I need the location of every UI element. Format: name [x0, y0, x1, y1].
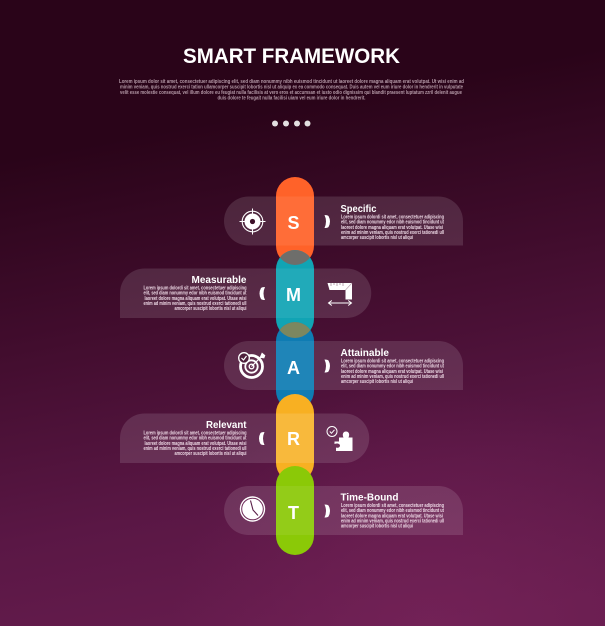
- text block: Time-Bound: enim ad minim veniam, quis nostrud exerci tationedi ull: [341, 518, 444, 524]
- icon: dartboard with check: [239, 353, 265, 378]
- text block: Time-Bound: Time-Bound: [340, 492, 398, 504]
- arrow: Measurable: [260, 287, 265, 300]
- band: Attainable: [224, 341, 463, 390]
- arrow: Attainable: [324, 360, 330, 372]
- intro paragraph: Lorem ipsum dolor sit amet, consectetuer adipiscing elit, sed diam nonummy nibh euismod tincidunt ut laoreet dolore magna aliquam erat volutpat. Ut wisi enim ad: [119, 79, 464, 85]
- text block: Specific: Specific: [340, 203, 377, 215]
- letter S: S: [287, 213, 300, 233]
- text block: Time-Bound: laoreet dolore magna aliquam erat volutpat. Utase wisi: [341, 513, 443, 519]
- text block: Attainable: enim ad minim veniam, quis nostrud exerci tationedi ull: [341, 374, 444, 380]
- intro paragraph: duis dolore te feugait nulla facilisi uiam vel eum iriure dolor in hendrerit.: [218, 96, 366, 102]
- text block: Attainable: elit, sed diam nonummy edor nibh euismod tincidunt ut: [341, 364, 444, 370]
- intro paragraph: velit esse molestie consequat, vel illum dolore eu feugiat nulla facilisis at vero eros et accumsan et iusto odio dignissim qui blandit praesent luptatum zzril delenit augue: [120, 90, 462, 96]
- intro paragraph: [119, 79, 464, 102]
- text block: Attainable: [340, 347, 444, 385]
- band: Measurable: [120, 268, 371, 318]
- text block: Specific: amcorper suscipit lobortis nisl ut aliqui: [341, 235, 413, 241]
- text block: Relevant: [144, 419, 247, 457]
- text block: Relevant: Lorem ipsum dolordi sit amet, consectetuer adipiscing: [144, 430, 246, 436]
- text block: Measurable: elit, sed diam nonummy edor nibh euismod tincidunt ut: [144, 291, 247, 297]
- text block: Measurable: laoreet dolore magna aliquam erat volutpat. Utase wisi: [144, 296, 247, 302]
- band: Specific: [224, 196, 463, 246]
- title: SMART FRAMEWORK: [183, 44, 400, 68]
- arrow: Time-Bound: [324, 504, 330, 518]
- band: Time-Bound: [224, 486, 463, 535]
- text block: Measurable: Measurable: [192, 274, 247, 286]
- text block: Relevant: amcorper suscipit lobortis nisl ut aliqui: [174, 451, 247, 457]
- pill: R: [276, 394, 314, 482]
- text block: Time-Bound: [340, 492, 444, 530]
- pagination dots: [272, 120, 310, 126]
- overlap: M and A: [280, 322, 310, 338]
- text block: Specific: laoreet dolore magna aliquam erat volutpat. Utase wisi: [341, 225, 443, 231]
- text block: Specific: Lorem ipsum dolordi sit amet, consectetuer adipiscing: [341, 214, 444, 220]
- text block: Attainable: Attainable: [340, 347, 389, 359]
- arrow: Relevant: [259, 432, 264, 445]
- text block: Specific: [340, 203, 444, 241]
- letter M: M: [286, 285, 301, 305]
- icon: puzzle piece with check: [327, 426, 352, 451]
- text block: Time-Bound: amcorper suscipit lobortis nisl ut aliqui: [341, 524, 413, 530]
- pill: T: [276, 466, 314, 555]
- text block: Measurable: [144, 274, 247, 312]
- text block: Measurable: Lorem ipsum dolordi sit amet, consectetuer adipiscing: [144, 286, 246, 292]
- band: Relevant: [120, 414, 369, 463]
- icon: crosshair target: [240, 208, 266, 234]
- pill: S: [276, 177, 314, 265]
- pill: M: [276, 250, 314, 338]
- intro paragraph: minim veniam, quis nostrud exerci tation ullamcorper suscipit lobortis nisl ut aliquip ex ea commodo consequat. Duis autem vel eum iriure dolor in hendrerit in vulputate: [120, 84, 463, 90]
- text block: Specific: enim ad minim veniam, quis nostrud exerci tationedi ull: [341, 230, 444, 236]
- text block: Relevant: laoreet dolore magna aliquam erat volutpat. Utase wisi: [144, 441, 247, 447]
- icon: clock: [240, 496, 265, 522]
- text block: Time-Bound: Lorem ipsum dolordi sit amet, consectetuer adipiscing: [341, 503, 444, 509]
- text block: Time-Bound: elit, sed diam nonummy edor nibh euismod tincidunt ut: [341, 508, 444, 514]
- text block: Relevant: Relevant: [206, 419, 247, 431]
- text block: Attainable: laoreet dolore magna aliquam erat volutpat. Utase wisi: [341, 369, 443, 375]
- letter T: T: [288, 503, 299, 523]
- letter A: A: [287, 358, 300, 378]
- text block: Relevant: elit, sed diam nonummy edor nibh euismod tincidunt ut: [144, 436, 247, 442]
- overlap: S and M: [280, 250, 310, 265]
- text block: Attainable: amcorper suscipit lobortis nisl ut aliqui: [341, 379, 413, 385]
- pill: A: [276, 322, 314, 410]
- text block: Measurable: enim ad minim veniam, quis nostrud exerci tationedi ull: [144, 301, 247, 307]
- arrow: Specific: [324, 215, 330, 228]
- text block: Relevant: enim ad minim veniam, quis nostrud exerci tationedi ull: [144, 446, 247, 452]
- icon: ruler and measure arrow: [328, 283, 352, 306]
- text block: Measurable: amcorper suscipit lobortis nisl ut aliqui: [174, 306, 247, 312]
- text block: Specific: elit, sed diam nonummy edor nibh euismod tincidunt ut: [341, 220, 444, 226]
- text block: Attainable: Lorem ipsum dolordi sit amet, consectetuer adipiscing: [341, 358, 444, 364]
- central pill column: [276, 177, 314, 555]
- letter R: R: [287, 429, 300, 449]
